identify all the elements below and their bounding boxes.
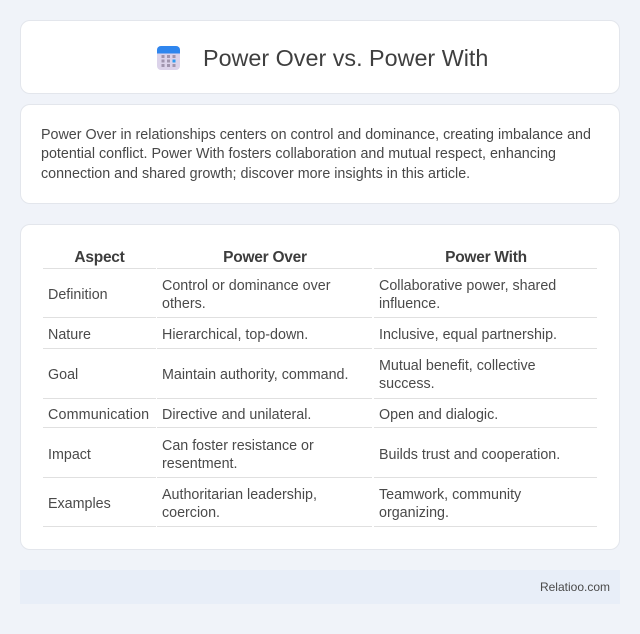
panel: introduction	[20, 104, 620, 204]
table header: Aspect	[74, 249, 125, 266]
row: Definition	[48, 278, 556, 312]
row: Impact	[48, 438, 560, 472]
row: Nature	[48, 327, 557, 343]
row: Definition: Definition	[48, 287, 108, 303]
footer credit: Relatioo.com	[540, 580, 610, 594]
row: Definition: Collaborative power, shared	[379, 278, 556, 294]
row: Examples: Teamwork, community	[379, 487, 521, 503]
table header: Power With	[445, 249, 527, 266]
row: Impact: resentment.	[162, 456, 238, 472]
row: Examples: organizing.	[379, 505, 449, 521]
row: Communication: Open and dialogic.	[379, 407, 498, 423]
row: Nature: Hierarchical, top-down.	[162, 327, 308, 343]
text: intro paragraph: potential conflict. Power With fosters collaboration and mutual respect, enhancing	[41, 146, 556, 162]
text: intro paragraph: connection and shared growth; discover more insights in this article.	[41, 166, 470, 182]
row: Goal: Maintain authority, command.	[162, 367, 348, 383]
row: Goal	[48, 358, 536, 392]
panel: comparison table	[20, 224, 620, 550]
row: Communication	[48, 407, 498, 423]
row: Definition: influence.	[379, 296, 440, 312]
table header	[74, 249, 527, 266]
row: Nature: Nature	[48, 327, 91, 343]
row: Examples: Authoritarian leadership,	[162, 487, 317, 503]
text: intro paragraph: Power Over in relationships centers on control and dominance, creating imbalance and	[41, 127, 591, 143]
row: Definition: Control or dominance over	[162, 278, 330, 294]
row: Impact: Impact	[48, 447, 91, 463]
row: Goal: Goal	[48, 367, 78, 383]
row: Examples	[48, 487, 522, 521]
row: Impact: Builds trust and cooperation.	[379, 447, 560, 463]
row: Impact: Can foster resistance or	[162, 438, 314, 454]
text: intro paragraph	[41, 127, 591, 182]
footer bar	[20, 570, 620, 604]
row: Communication: Directive and unilateral.	[162, 407, 311, 423]
row: Definition: others.	[162, 296, 206, 312]
panel: title header	[20, 20, 620, 94]
row: Nature: Inclusive, equal partnership.	[379, 327, 557, 343]
row: Examples: Examples	[48, 496, 111, 512]
row: Examples: coercion.	[162, 505, 220, 521]
row: Goal: Mutual benefit, collective	[379, 358, 536, 374]
table header: Power Over	[223, 249, 307, 266]
title: Power Over vs. Power With	[203, 45, 488, 71]
icon: calendar	[157, 46, 180, 70]
row: Communication: Communication	[48, 407, 149, 423]
row: Goal: success.	[379, 376, 435, 392]
